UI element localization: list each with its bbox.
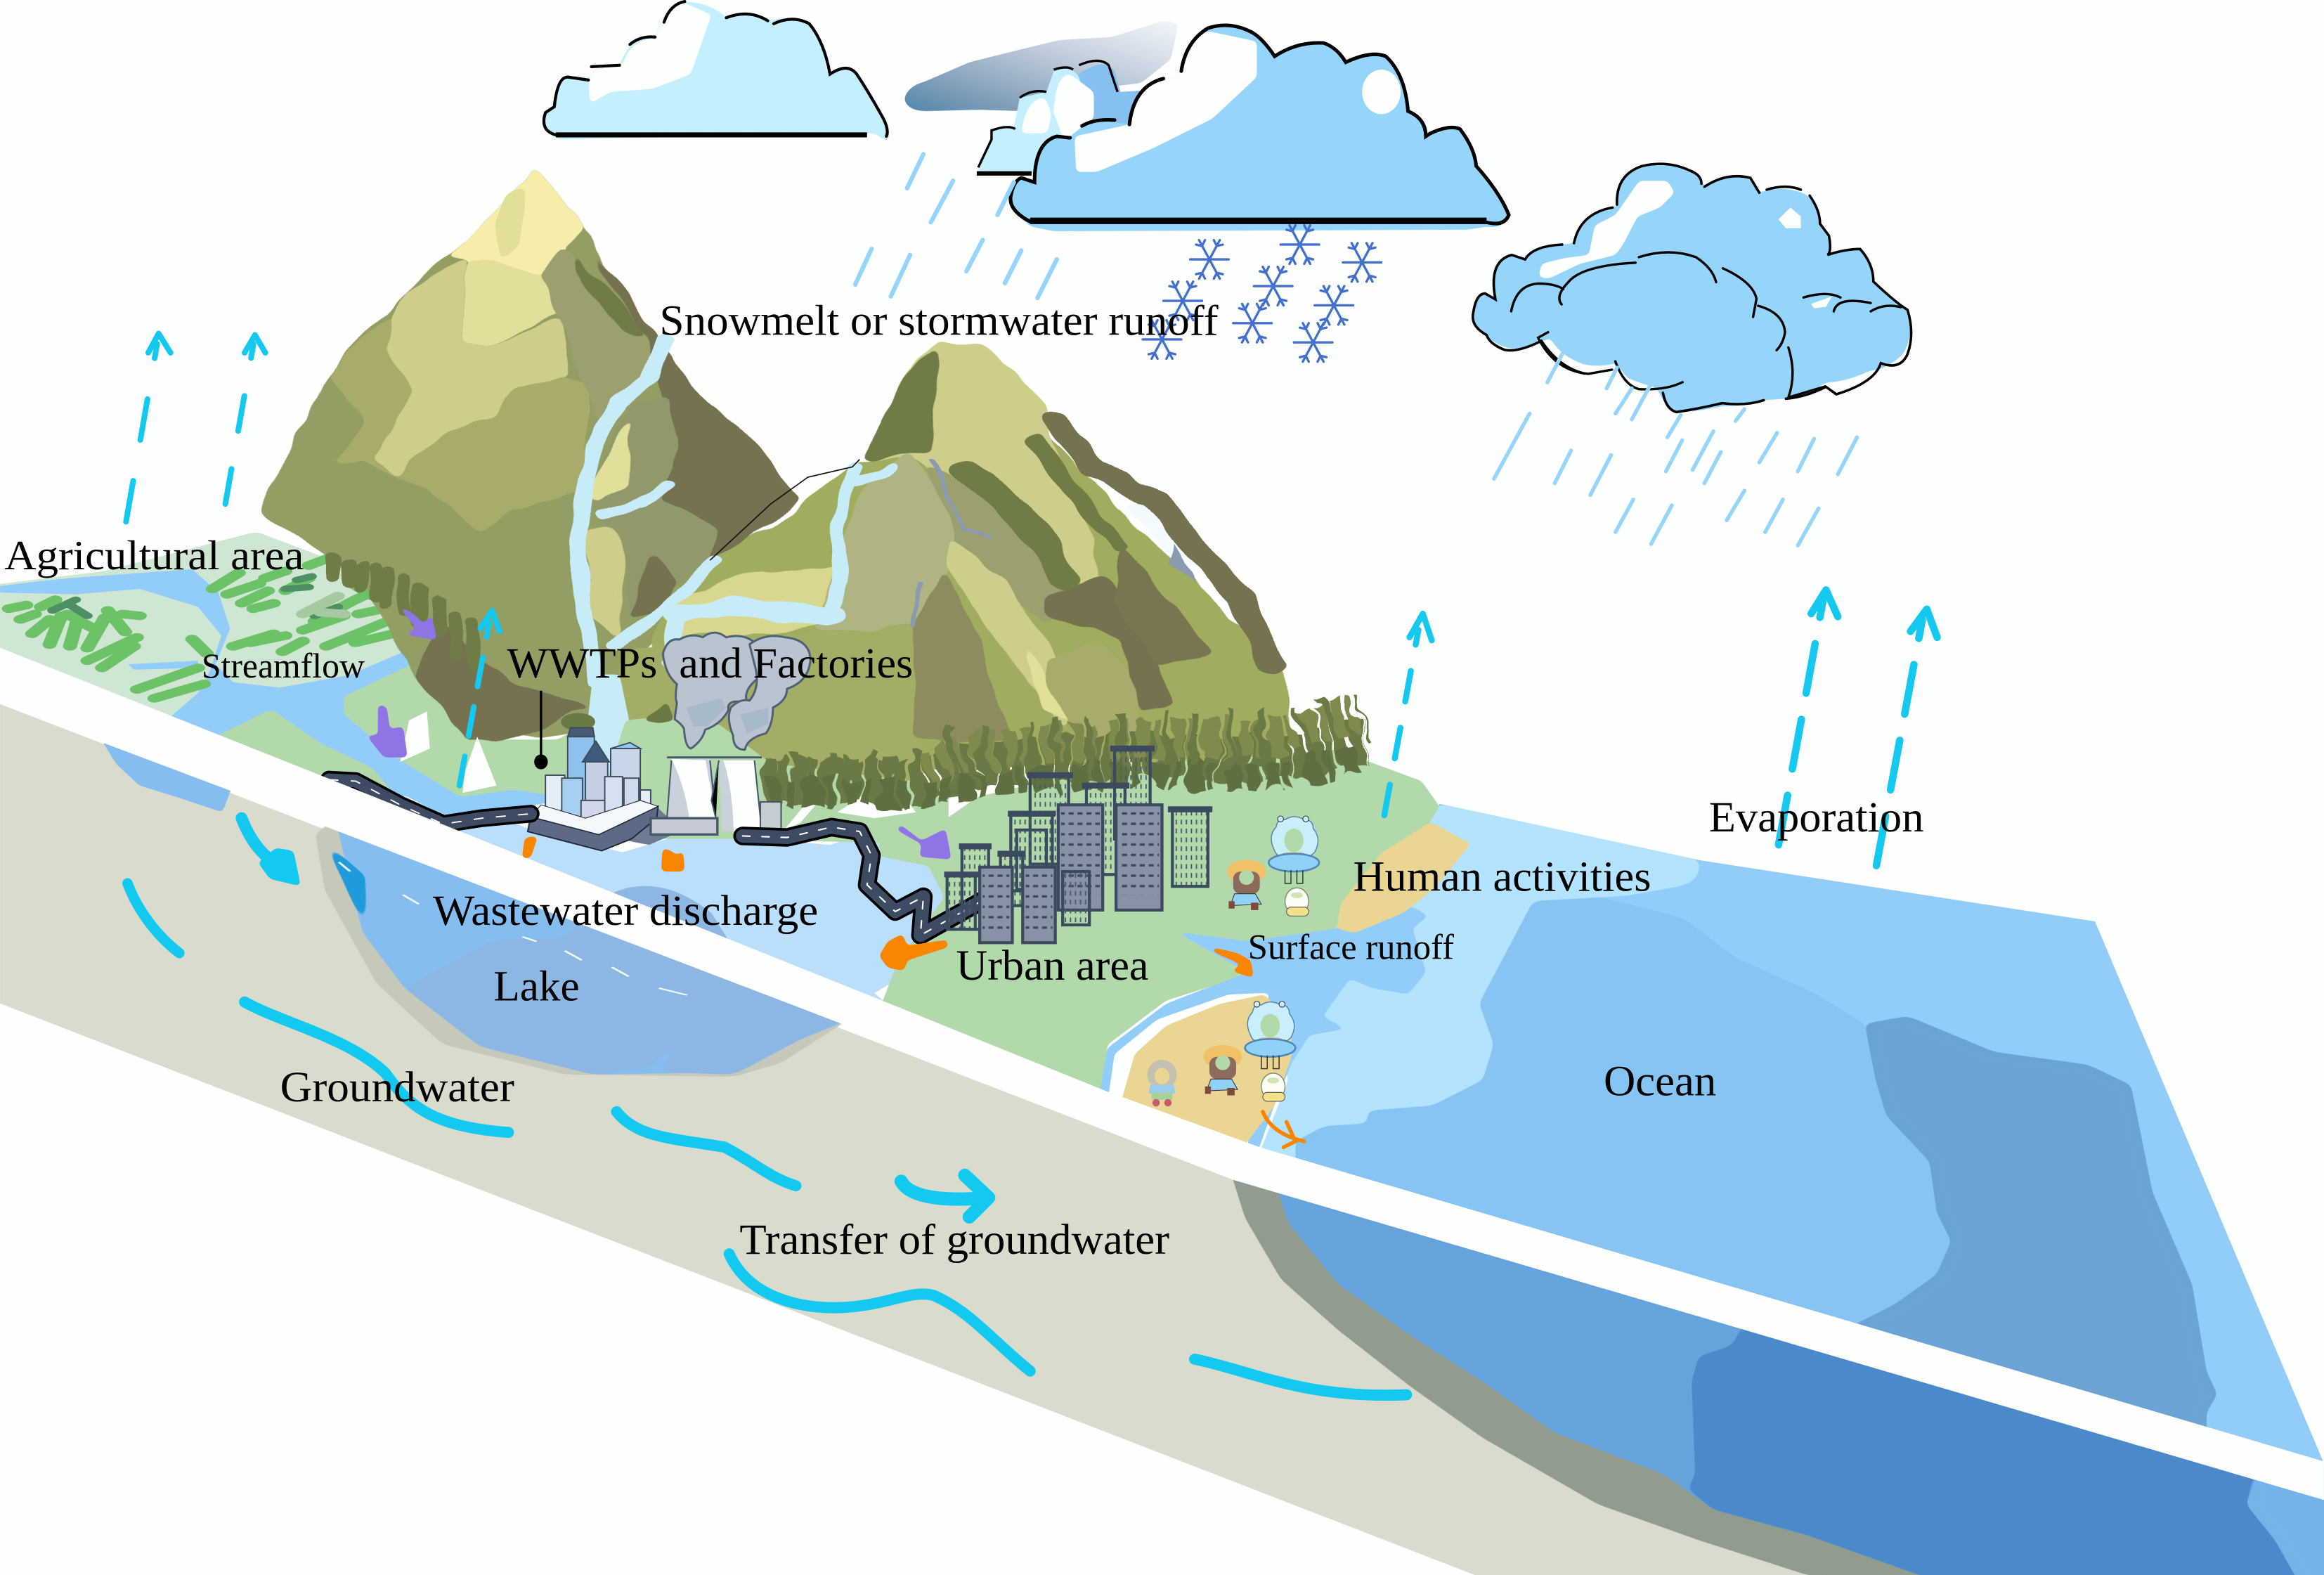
panel: urban buildings [944,748,1212,942]
arrows: evaporation [126,334,1937,866]
arrow: purple runoff arrows [366,603,952,860]
panel: grey storm cloud [904,21,1179,111]
arrows: groundwater flow [127,818,1406,1395]
solid towers [980,805,1162,942]
platform [528,806,658,851]
panel: coastal shallow water [1094,907,1428,1151]
panel: right mountain [623,338,1294,786]
sand: upper beach [1337,822,1471,933]
label: human activities: Human activities [1353,853,1651,900]
panel: left cloud [544,1,889,142]
panel: lake surface [445,801,963,1037]
crop rows [8,557,408,699]
glass towers [545,728,651,824]
label: transfer of groundwater: Transfer of groundwater [739,1216,1169,1264]
panel: urban green land [879,750,1471,1151]
panel: forest [763,711,1367,794]
rain: left clouds [855,154,1057,298]
cooling towers [667,759,718,818]
platform foot [623,808,670,845]
river: streamflow [0,569,559,815]
icon: mountain ridge line [710,460,859,560]
arrow: orange beach arrow [1263,1112,1304,1147]
icon: smoke [663,633,810,750]
icon: white gaps near foot of mountain [400,711,916,830]
dark fringe at base [334,556,478,668]
label: ocean: Ocean [1604,1058,1716,1106]
arrow: groundwater seep head [258,848,301,886]
label: surface runoff: Surface runoff [1248,928,1454,967]
panel: waterfall [560,675,640,808]
panel: green ground behind plant [593,717,949,845]
ridges and streaks [911,419,1271,665]
label: urban area: Urban area [956,942,1149,990]
sand: lower beach [1121,994,1292,1151]
label: WWTPs and factories: WWTPs and Factories [507,640,913,687]
label: groundwater: Groundwater [280,1063,514,1111]
panel: lake cross-section [316,815,847,1077]
icon: bushes near waterfall [560,701,675,731]
icon: human figures near city [1227,816,1319,916]
arrow: orange discharge arrows [521,836,1254,978]
label: lake: Lake [493,963,580,1011]
label: wastewater discharge: Wastewater discharge [433,887,818,935]
island in wastewater zone [611,886,734,949]
label: streamflow: Streamflow [202,647,365,685]
panel: groundwater soil layer [0,704,1838,1575]
green patch by streamflow [209,709,402,804]
panel: small cloud behind [977,60,1171,174]
icon: factory complex [528,728,781,851]
panel: ocean bank and depth layers [1231,804,2324,1575]
panel: right cloud [1473,164,1911,412]
lower brown slope [414,621,589,741]
panel: snowmelt rivers [577,340,892,681]
label: evaporation: Evaporation [1709,793,1924,841]
panel: central big cloud [1011,25,1509,231]
panel: mountains [259,167,1294,786]
icon: human figures on beach [1147,1002,1295,1106]
road: river of wastewater [329,779,981,935]
panel: left mountain [259,167,800,741]
callout leader: WWTPs [534,691,548,770]
panel: small water seep under streamflow [93,726,233,812]
outlined towers [947,750,1208,929]
white strip section cut [0,648,2324,1500]
rain: right cloud [1494,351,1857,545]
snow: snowflakes [1143,226,1382,362]
green patch by factories [344,661,676,808]
label: snowmelt: Snowmelt or stormwater runoff [660,297,1219,345]
label: agricultural area: Agricultural area [4,532,304,578]
panel: agricultural area [0,531,676,815]
